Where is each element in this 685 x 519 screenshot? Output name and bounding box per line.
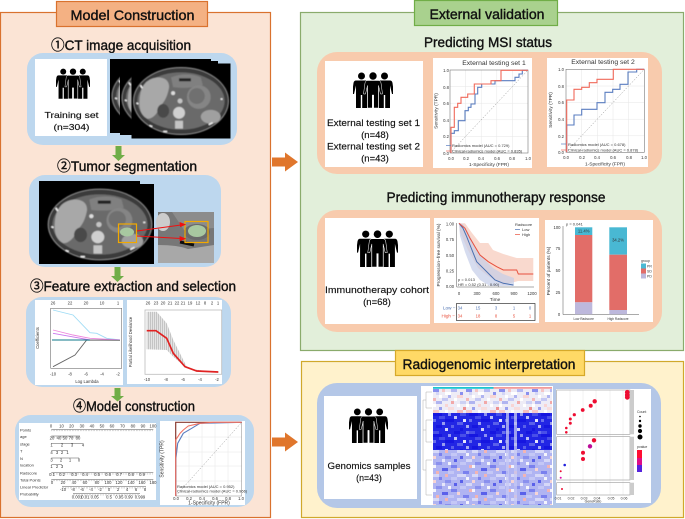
chart: ROC external set 2: 1.0 <box>641 155 648 160</box>
chart: nomogram: 3 <box>71 442 74 448</box>
chart: lasso coefficients <box>35 300 123 385</box>
chart: nomogram: 180 <box>150 480 157 485</box>
chart: nomogram: 50 <box>63 436 68 440</box>
chart: survival curve: 300 <box>474 291 481 296</box>
chart: nomogram: 0.4 <box>82 472 89 477</box>
chart: deviance: -8 <box>164 377 169 382</box>
chart: response stacked bars: 100 <box>554 225 561 230</box>
chart: nomogram: 2 <box>117 487 120 492</box>
chart: nomogram: 160 <box>138 480 146 485</box>
chart: survival curve: 1 <box>513 306 516 310</box>
heading: feature extraction: ③Feature extraction and selection <box>30 278 236 294</box>
chart: ROC external set 1: 0.4 <box>478 156 485 161</box>
chart: training ROC: 0.8 <box>225 496 232 501</box>
chart: ROC external set 2: 0.6 <box>610 155 617 160</box>
icon: people <box>352 72 394 108</box>
chart: nomogram: 100 <box>104 480 112 485</box>
panel: feature extraction <box>26 297 231 387</box>
chart: ROC external set 2: Sensitivity (TPR) <box>548 92 554 128</box>
external testing cohort card <box>325 61 423 167</box>
chart: nomogram: 0.001 <box>72 494 83 500</box>
chart: deviance: -6 <box>181 377 186 382</box>
chart: nomogram: 30 <box>80 424 85 428</box>
chart: nomogram: 120 <box>116 480 123 485</box>
chart: deviance: 2 <box>211 300 214 306</box>
chart: ROC external set 2: 0.4 <box>558 117 565 122</box>
arrow: step 1 to 2 <box>112 146 125 161</box>
chart: nomogram: 140 <box>128 480 135 485</box>
chart: deviance: 19 <box>188 300 193 306</box>
chart: nomogram: 4 <box>82 442 85 448</box>
chart: nomogram: 0.9 <box>139 472 146 477</box>
chart: response stacked bars: Percent of patients (%) <box>546 246 552 295</box>
CT image stack <box>110 59 230 138</box>
chart: survival curve: 1200 <box>527 291 537 296</box>
chart: nomogram: N <box>20 456 23 461</box>
chart: nomogram: -6 <box>80 487 85 492</box>
arrow: step 2 to 3 <box>111 267 124 282</box>
chart: enrichment dot plot: pvalue <box>637 445 647 449</box>
chart: training ROC: Sensitivity (TPR) <box>160 440 166 478</box>
chart: lasso coefficients: Log Lambda <box>75 379 99 384</box>
chart: lasso coefficients: -10 <box>50 372 57 376</box>
chart: ROC external set 2: Radiomics model (AUC = 0.678) <box>568 142 626 147</box>
chart: survival curve: HR = 0.52 (0.31 - 0.90) <box>458 282 500 287</box>
external testing cohort card: (n=43) <box>361 154 389 164</box>
chart: ROC external set 2: 0.2 <box>558 134 565 139</box>
chart: nomogram: 0 <box>51 480 54 485</box>
label: immunotherapy cohort: Immunotherapy cohort <box>325 285 429 296</box>
chart: ROC external set 2: 0.0 <box>563 155 570 160</box>
chart: survival curve: 1.00 <box>446 222 455 226</box>
chart: survival curve: 0 <box>529 306 532 310</box>
chart: survival curve: 600 <box>492 291 500 296</box>
training set card: (n=304) <box>54 122 90 132</box>
chart: nomogram: 20 <box>61 480 66 485</box>
chart: training ROC: 0.4 <box>199 496 206 501</box>
arrow: to external validation <box>272 152 298 172</box>
chart: survival curve: 34 <box>458 314 463 318</box>
chart: nomogram: 2 <box>56 464 59 469</box>
chart: enrichment dot plot: GeneRatio <box>585 500 601 504</box>
chart: survival curve: 0.25 <box>446 268 455 274</box>
chart: response stacked bars: 25 <box>556 290 561 295</box>
chart: nomogram: location <box>20 462 34 468</box>
chart: nomogram: 6 <box>135 487 138 492</box>
chart: enrichment dot plot <box>555 389 651 504</box>
chart: survival curve: Low − <box>443 306 456 310</box>
heading: predicting immunotherapy response: Predicting immunotherapy response <box>386 189 606 205</box>
chart: nomogram: 3 <box>50 458 53 462</box>
chart: nomogram: 0.999 <box>135 494 146 500</box>
chart: lasso coefficients: -6 <box>84 372 89 376</box>
chart: ROC external set 2: External testing set 2 <box>571 59 635 66</box>
chart: nomogram: 0 <box>78 458 81 462</box>
chart: ROC external set 1: 0.6 <box>494 156 501 161</box>
chart: enrichment dot plot: 0.03 <box>581 496 587 500</box>
chart: nomogram: -2 <box>98 487 103 492</box>
panel: external validation <box>300 0 684 350</box>
chart: nomogram: 3 <box>61 464 64 469</box>
chart: deviance: 22 <box>175 300 180 306</box>
chart: training ROC: Clinical-radiomics model (AUC = 0.966) <box>177 488 248 494</box>
heading: external validation: External validation <box>430 6 544 22</box>
chart: nomogram: T <box>20 448 23 454</box>
chart: deviance: 20 <box>161 300 166 306</box>
chart: response stacked bars: 34.2% <box>612 238 624 242</box>
chart: survival curve <box>434 218 539 323</box>
chart: lasso coefficients: 20 <box>84 300 89 306</box>
chart: survival curve: p = 0.013 <box>458 277 476 282</box>
chart: deviance: 21 <box>181 300 186 306</box>
chart: survival curve: 1 <box>529 314 532 318</box>
label: training set: Training set <box>44 110 99 120</box>
training set card <box>35 59 107 136</box>
chart: ROC external set 1: 0.4 <box>443 118 450 123</box>
icon: people <box>356 230 399 267</box>
chart: deviance: -2 <box>215 377 220 382</box>
chart: nomogram: 0.01 0.05 <box>81 494 99 500</box>
chart: nomogram: 0.6 <box>105 472 112 477</box>
chart: training ROC: Radiomics model (AUC = 0.952) <box>177 484 235 489</box>
chart: ROC external set 2: 0.0 <box>558 150 565 155</box>
heading: model construction: Model Construction <box>70 7 194 23</box>
chart: ROC external set 2: 0.4 <box>594 155 601 160</box>
chart: survival curve: 15 <box>476 306 481 310</box>
chart: survival curve: 34 <box>458 306 463 310</box>
heading: external validation <box>414 0 558 26</box>
chart: survival curve: 0 <box>458 291 461 296</box>
chart: nomogram: 40 <box>72 480 77 485</box>
chart: nomogram: 0.8 <box>128 472 135 477</box>
chart: lasso coefficients: Coefficients <box>35 327 40 349</box>
chart: survival curve: High − <box>442 314 455 318</box>
chart: survival curve: 900 <box>510 291 518 296</box>
chart: lasso coefficients: 10 <box>100 300 105 306</box>
chart: nomogram: 0.3 <box>71 472 78 477</box>
icon: people <box>348 408 389 443</box>
heading: model construction <box>56 2 208 26</box>
chart: ROC external set 1: 0.8 <box>443 85 450 90</box>
panel: model construction <box>0 2 270 518</box>
chart: nomogram: -8 <box>71 487 76 492</box>
chart: enrichment dot plot: 0.04 <box>594 496 600 500</box>
chart: lasso coefficients: -4 <box>100 372 105 376</box>
chart: nomogram: Probability <box>20 492 39 496</box>
tumor zoom crop <box>156 212 214 263</box>
chart: nomogram: -4 <box>89 487 94 492</box>
chart: enrichment dot plot: 0.01 <box>555 496 561 500</box>
chart: training ROC: 0.0 <box>173 496 180 501</box>
chart: ROC external set 1: External testing set 1 <box>462 60 526 67</box>
chart: survival curve: 0.75 <box>446 237 455 242</box>
chart: ROC external set 2: Clinical-radiomics model (AUC = 0.878) <box>568 148 639 152</box>
heading: CT image acquisition: ①CT image acquisition <box>51 37 191 53</box>
chart: ROC external set 1: 0.8 <box>509 156 516 161</box>
chart: training ROC <box>160 421 248 506</box>
chart: nomogram: 80 <box>131 424 136 428</box>
chart: deviance: Partial Likelihood Deviance <box>128 316 133 367</box>
chart: response stacked bars: 75 <box>556 246 561 251</box>
label: genomics samples: Genomics samples <box>328 461 411 471</box>
chart: ROC external set 1: 0.0 <box>448 156 455 161</box>
chart: nomogram: 100 <box>150 424 157 428</box>
chart: deviance: -4 <box>198 377 203 382</box>
chart: nomogram: 3 <box>56 450 59 455</box>
chart: ROC external set 1: Sensitivity (TPR) <box>434 93 440 129</box>
external testing cohort card: External testing set 2 <box>327 142 420 152</box>
chart: enrichment dot plot: 0.05 <box>608 496 614 500</box>
chart: nomogram: 1 <box>66 450 69 455</box>
chart: nomogram: 1 <box>69 458 72 462</box>
chart: enrichment dot plot: Count <box>637 410 646 414</box>
chart: response stacked bars: Low Radscore <box>574 317 594 321</box>
chart: nomogram: Linear Predictor <box>20 484 49 490</box>
chart: nomogram: 40 <box>90 424 95 428</box>
chart: ROC external set 2 <box>547 58 648 168</box>
chart: response stacked bars: p = 0.041 <box>566 222 584 226</box>
chart: ROC external set 2: 0.8 <box>558 84 565 89</box>
panel: CT image acquisition <box>27 53 237 145</box>
panel: MSI status <box>317 52 662 174</box>
label: external testing sets: External testing set 1 <box>327 118 420 129</box>
chart: survival curve: 8 <box>495 314 498 318</box>
chart: nomogram: 1 <box>50 464 53 469</box>
chart: training ROC: 0.2 <box>186 496 193 501</box>
panel: model construction step <box>15 415 254 507</box>
chart: response stacked bars: group <box>641 259 650 263</box>
chart: nomogram: 1 <box>50 442 53 448</box>
chart: survival curve: 0.00 <box>446 284 455 289</box>
chart: nomogram: 0.95 0.99 <box>115 494 133 500</box>
chart: nomogram: 0.7 <box>116 472 123 477</box>
chart: nomogram: 70 <box>69 436 74 440</box>
chart: survival curve: 0.50 <box>446 253 455 258</box>
chart: response stacked bars: PR <box>647 264 652 268</box>
chart: deviance: -10 <box>144 377 151 382</box>
chart: nomogram: 20 <box>69 424 74 428</box>
chart: deviance: 23 <box>154 300 159 306</box>
chart: response stacked bars: SD <box>647 270 652 274</box>
tumor box <box>118 224 136 242</box>
chart: lasso coefficients: -8 <box>68 372 73 376</box>
chart: ROC external set 1: 1.0 <box>443 68 450 73</box>
CT slices <box>39 181 154 264</box>
chart: nomogram: 60 <box>83 480 88 485</box>
external testing cohort card: (n=48) <box>361 130 389 141</box>
chart: ROC external set 1: 0.2 <box>443 134 450 139</box>
chart: nomogram: 80 <box>95 480 100 485</box>
chart: ROC external set 1: 0.2 <box>463 156 470 161</box>
chart: nomogram: stage <box>20 442 31 446</box>
chart: deviance: 26 <box>146 300 151 306</box>
chart: survival curve: 5 <box>513 314 516 318</box>
chart: deviance: 21 <box>168 300 173 306</box>
chart: ROC external set 2: 0.2 <box>579 155 586 160</box>
chart: nomogram: Total Points <box>20 478 41 482</box>
chart: deviance: 8 <box>204 300 207 306</box>
chart: nomogram: 40 <box>57 436 62 440</box>
chart: training ROC: 1-Specificity (FPR) <box>188 500 230 506</box>
chart: ROC external set 2: 0.8 <box>626 155 633 160</box>
chart: lasso coefficients: 26 <box>51 300 56 306</box>
chart: nomogram: 0.2 <box>59 472 66 477</box>
chart: nomogram: -10 <box>60 487 67 492</box>
chart: ROC external set 1: 1-Specificity (FPR) <box>469 162 509 168</box>
chart: nomogram: 2 <box>61 450 64 455</box>
chart: nomogram: 2 <box>60 458 63 462</box>
panel: radiogenomic interpretation <box>302 350 684 518</box>
chart: survival curve: Progression−free survival (%) <box>436 223 442 287</box>
chart: ROC external set 2: 1-Specificity (FPR) <box>585 162 625 168</box>
chart: lasso coefficients: -2 <box>116 372 121 376</box>
chart: response stacked bars: High Radscore <box>607 317 629 321</box>
chart: nomogram: 10 <box>59 424 64 428</box>
chart: response stacked bars: 0 <box>558 312 561 317</box>
chart: nomogram: 60 <box>110 424 115 428</box>
chart: nomogram <box>19 423 157 500</box>
genomics samples card <box>324 396 417 499</box>
heading: radiogenomic interpretation <box>396 350 584 376</box>
chart: survival curve: Radscore <box>515 222 533 227</box>
chart: ROC external set 1 <box>433 58 532 168</box>
chart: nomogram: 70 <box>120 424 125 428</box>
chart: survival curve: Time <box>490 297 501 303</box>
chart: training ROC: 0.6 <box>212 496 219 501</box>
panel: immunotherapy response <box>317 210 662 332</box>
chart: ROC external set 2: 1.0 <box>558 67 565 72</box>
heading: model construction step: ④Model construction <box>73 398 195 414</box>
chart: nomogram: Radscore <box>20 470 38 476</box>
chart: nomogram: age <box>20 434 27 439</box>
chart: survival curve: High <box>522 232 530 237</box>
chart: lasso coefficients: 22 <box>68 300 73 306</box>
chart: nomogram: 2 <box>61 442 64 448</box>
chart: nomogram: Points <box>20 428 31 432</box>
immunotherapy cohort card: (n=68) <box>363 297 391 308</box>
icon: people <box>55 68 91 99</box>
immunotherapy cohort card <box>325 218 430 324</box>
chart: response stacked bars: PD <box>647 274 652 278</box>
chart: nomogram: 80 <box>76 436 81 440</box>
chart: survival curve: Low <box>522 227 529 232</box>
chart: lasso coefficients: 1 <box>117 300 120 306</box>
chart: ROC external set 1: 1.0 <box>525 156 532 161</box>
chart: survival curve: 18 <box>476 314 481 318</box>
chart: survival curve: 3 <box>495 306 498 310</box>
chart: deviance <box>127 300 222 384</box>
chart: nomogram: 4 <box>50 450 53 455</box>
chart: ROC external set 1: Radiomics model (AUC = 0.729) <box>452 143 510 148</box>
chart: nomogram: 0.5 <box>106 494 113 500</box>
chart: enrichment dot plot: 0.02 <box>568 496 574 500</box>
chart: nomogram: 0.5 <box>94 472 101 477</box>
chart: heatmap <box>421 386 553 505</box>
chart: deviance: 1 <box>217 300 220 306</box>
chart: nomogram: 0 <box>50 424 53 428</box>
chart: response stacked bars: 11.4% <box>578 228 590 234</box>
panel: tumor segmentation <box>29 175 221 267</box>
genomics samples card: (n=43) <box>356 473 382 483</box>
chart: deviance: 12 <box>196 300 201 306</box>
arrows: zoom connectors <box>137 223 185 241</box>
heading: predicting MSI status: Predicting MSI status <box>424 34 552 50</box>
chart: nomogram: 0 <box>108 487 111 492</box>
chart: nomogram: 0.1 <box>49 472 56 477</box>
chart: ROC external set 1: 0.6 <box>443 101 450 106</box>
chart: response stacked bars: 50 <box>556 268 561 273</box>
arrow: step 3 to 4 <box>111 388 124 402</box>
chart: ROC external set 1: Clinical-radiomics model (AUC = 0.835) <box>452 148 523 153</box>
heading: radiogenomic interpretation: Radiogenomic interpretation <box>402 356 576 372</box>
chart: training ROC: 1.0 <box>238 496 245 501</box>
arrow: to radiogenomic interpretation <box>272 432 298 452</box>
panel: genomics <box>317 383 661 508</box>
chart: nomogram: 50 <box>100 424 105 428</box>
chart: enrichment dot plot: 0.06 <box>621 496 627 500</box>
chart: response stacked bars <box>545 220 653 322</box>
chart: ROC external set 2: 0.6 <box>558 100 565 105</box>
chart: nomogram: 8 <box>144 487 147 492</box>
chart: nomogram: 90 <box>141 424 146 428</box>
chart: nomogram: 4 <box>126 487 129 492</box>
chart: ROC external set 1: 0.0 <box>443 151 450 156</box>
chart: nomogram: 20 <box>50 436 55 440</box>
heading: tumor segmentation: ②Tumor segmentation <box>57 158 197 174</box>
